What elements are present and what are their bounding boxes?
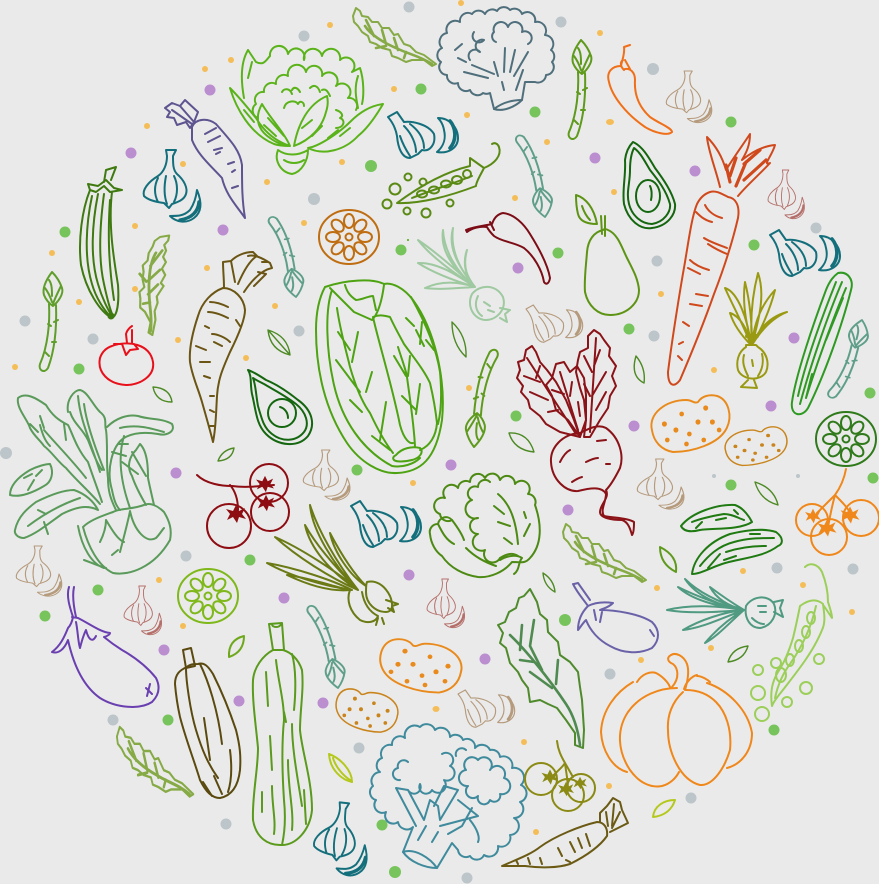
lotus: lime (178, 569, 238, 623)
asparagus: teal lower (307, 602, 348, 691)
potato: small center (336, 689, 398, 732)
garlic: far left (16, 546, 62, 596)
lotus: dark green (816, 412, 876, 466)
garlic: red lower left (124, 586, 162, 635)
asparagus: center (464, 348, 498, 449)
broccoli: lower (370, 724, 527, 868)
chili: dark red (466, 213, 550, 284)
tomatoes: olive (525, 741, 595, 811)
tomato: red (100, 326, 153, 385)
parsnip: brown (190, 252, 272, 442)
garlic: center (526, 305, 583, 342)
chili: orange (608, 45, 672, 134)
asparagus: center top (515, 132, 555, 220)
pickle: lower (692, 530, 782, 574)
leaf: large center bottom (498, 589, 584, 748)
garlic: teal left (144, 150, 200, 222)
zucchini: dark green left (80, 167, 122, 318)
zucchini: big green (253, 623, 312, 845)
broccoli: top (437, 7, 554, 110)
radish: purple (165, 100, 245, 218)
leaf: lower left (117, 727, 193, 797)
leaf: thick small lime (229, 636, 244, 657)
parsnip: lower olive (502, 798, 628, 867)
asparagus: right (827, 317, 872, 403)
avocado: top (623, 142, 675, 228)
pear (576, 195, 639, 315)
onion: yellow (725, 273, 787, 388)
garlic: teal top (388, 112, 458, 158)
garlic: lower center (458, 690, 515, 727)
garlic: top right (768, 170, 804, 219)
onion: right teal (667, 579, 783, 643)
lotus: orange (319, 210, 379, 264)
cauliflower (230, 46, 383, 174)
napa cabbage (316, 240, 443, 473)
pumpkin (601, 654, 752, 786)
eggplant: purple (52, 587, 159, 707)
carrot: large (668, 134, 775, 385)
garlic: teal bottom (311, 800, 372, 877)
potato: large right (651, 395, 729, 452)
pickle: upper (681, 505, 752, 531)
tomatoes: dark red (197, 464, 289, 548)
small leaf outlines (153, 322, 778, 662)
cucumber: right (792, 273, 852, 414)
kohlrabi (10, 390, 173, 574)
garlic: teal right (770, 230, 840, 276)
garlic: center right (637, 459, 684, 509)
potato: large center (380, 639, 462, 693)
asparagus: top (569, 40, 591, 139)
cabbage: green (430, 474, 540, 577)
beet: dark red (517, 330, 634, 535)
pea pod: right (751, 564, 832, 721)
asparagus: far left (40, 272, 62, 371)
leaf: yellow-green bottom (653, 800, 675, 817)
onion: light green (418, 228, 510, 322)
potato: small right (725, 427, 787, 465)
avocado: center-left (248, 370, 312, 444)
leaf: left small (111, 233, 207, 336)
leaf: center right (563, 524, 646, 582)
green onion (267, 505, 398, 625)
asparagus: teal upper (268, 213, 306, 299)
zucchini: olive (175, 648, 240, 798)
decorative dots: purple (126, 84, 800, 708)
pea pod: top (382, 143, 500, 218)
leaf: thick small green (660, 547, 676, 572)
leaf: yellow-green large (329, 754, 352, 782)
garlic: center left (303, 450, 350, 500)
leaf: top (353, 8, 436, 66)
garlic: teal center (351, 501, 421, 547)
tomatoes: orange (796, 469, 879, 555)
garlic: top (666, 71, 712, 123)
garlic: red center (427, 579, 465, 628)
eggplant: right (573, 583, 658, 652)
